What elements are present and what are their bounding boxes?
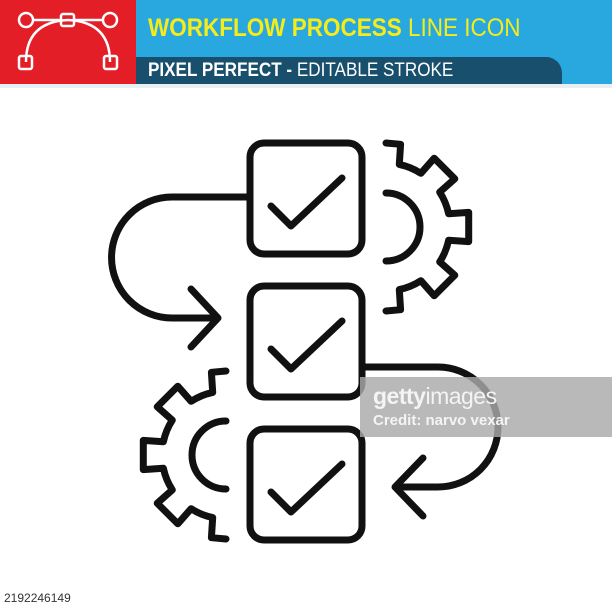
watermark: Credit: narvo vexar <box>373 412 510 429</box>
arrow 1 <box>112 197 248 347</box>
watermark: gettyimages <box>373 383 497 409</box>
checkbox 2 <box>250 286 362 397</box>
subtitle: PIXEL PERFECT - EDITABLE STROKE <box>148 60 453 81</box>
gear right <box>386 143 469 311</box>
icon: bezier curve <box>18 12 118 70</box>
title: WORKFLOW PROCESS LINE ICON <box>148 14 521 42</box>
checkbox 1 <box>250 143 362 254</box>
header red logo panel <box>0 0 136 84</box>
image id: 2192246149 <box>4 591 71 605</box>
arrow 2 <box>364 367 498 516</box>
header blue banner <box>136 0 612 84</box>
checkbox 3 <box>250 429 362 540</box>
gear left <box>143 371 226 539</box>
watermark <box>360 377 612 437</box>
subtitle bar <box>136 57 562 84</box>
